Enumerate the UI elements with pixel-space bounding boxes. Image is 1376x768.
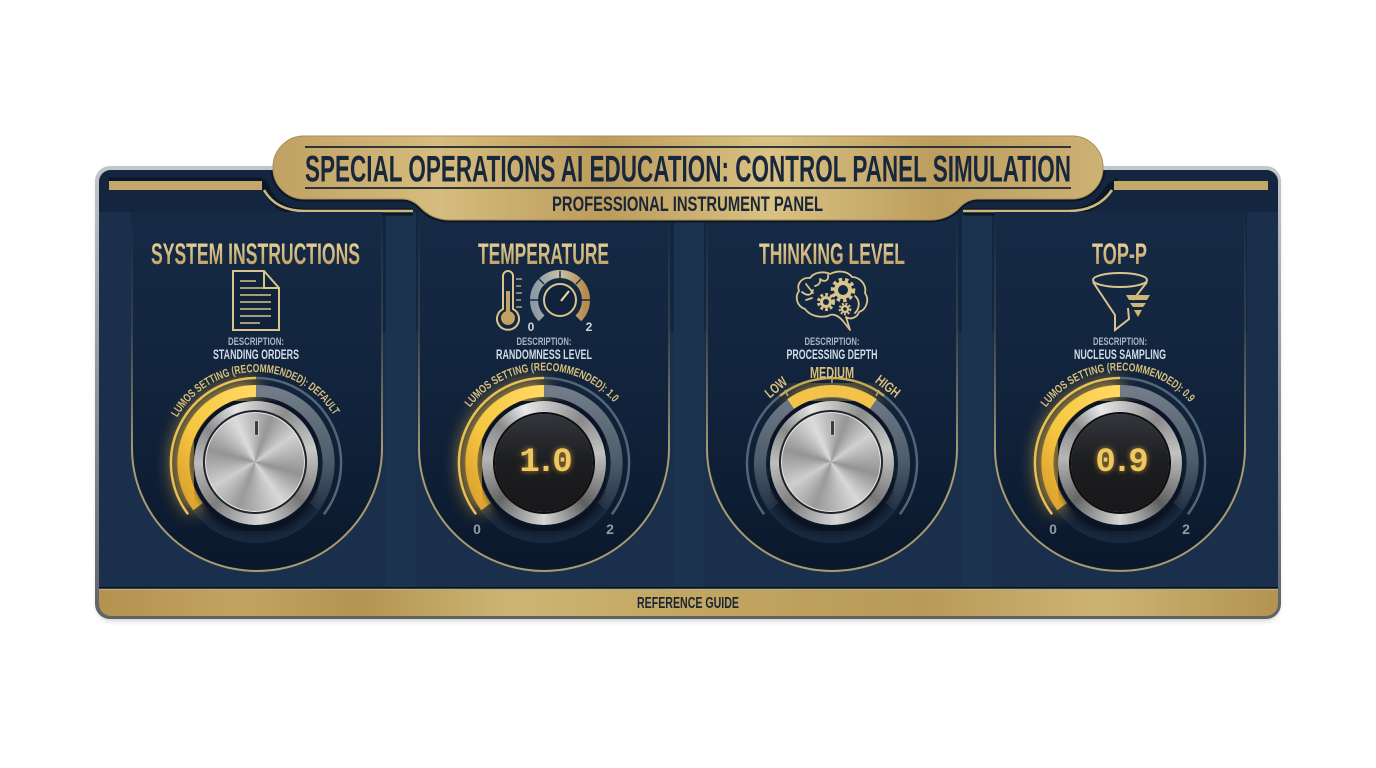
knob: [194, 401, 318, 531]
upper gold trim left: [109, 181, 413, 212]
knob with readout: 1.0: [519, 444, 569, 482]
description: [786, 336, 878, 362]
setting label: LUMOS SETTING (RECOMMENDED): 1.0: [464, 362, 619, 407]
subtitle: PROFESSIONAL INSTRUMENT PANEL: [552, 193, 823, 216]
panel: temperature: [418, 227, 670, 572]
panel outline: [419, 212, 669, 571]
icon: funnel: [1093, 273, 1150, 330]
description: RANDOMNESS LEVEL: [496, 347, 592, 362]
description: PROCESSING DEPTH: [786, 347, 878, 362]
panel outline: [132, 212, 382, 571]
icon: gauge: [528, 271, 593, 334]
dial gauge: [1024, 362, 1206, 543]
icon: document: [233, 271, 279, 330]
dial gauge: [160, 364, 342, 543]
description: [496, 336, 592, 362]
panel: thinking level: [707, 212, 957, 571]
description: [1074, 336, 1166, 362]
icon: gauge: 0: [528, 320, 535, 334]
heading: SYSTEM INSTRUCTIONS: [151, 238, 360, 271]
panel: system instructions: [131, 212, 383, 572]
description: [213, 336, 299, 362]
upper gold trim right: [963, 181, 1268, 212]
description: DESCRIPTION:: [228, 336, 284, 348]
scale labels: [1049, 521, 1190, 537]
knob: [770, 401, 894, 531]
scale labels: 2: [1182, 521, 1190, 537]
control panel illustration: [94, 136, 1282, 624]
dial gauge: [747, 365, 917, 543]
scale labels: [473, 521, 614, 537]
level labels: HIGH: [873, 371, 904, 401]
level labels: MEDIUM: [810, 365, 854, 382]
level labels: [761, 365, 904, 401]
heading: TEMPERATURE: [478, 238, 609, 271]
scale labels: 2: [606, 521, 614, 537]
icon: thermometer: [497, 271, 522, 330]
knob with readout: 0.9: [1095, 444, 1145, 482]
panel outline: [995, 212, 1245, 571]
panel outline: [707, 212, 957, 571]
heading: TOP-P: [1092, 238, 1147, 271]
setting label: LUMOS SETTING (RECOMMENDED): DEFAULT: [170, 364, 340, 417]
description: DESCRIPTION:: [516, 336, 572, 348]
panel chassis: [95, 166, 1281, 621]
description: DESCRIPTION:: [804, 336, 860, 348]
setting label: LUMOS SETTING (RECOMMENDED): 0.9: [1040, 362, 1195, 407]
description: DESCRIPTION:: [1093, 336, 1147, 348]
description: STANDING ORDERS: [213, 347, 299, 362]
title plate: [273, 136, 1103, 220]
level labels: LOW: [761, 373, 791, 401]
icon: brain with gears: [797, 272, 867, 330]
panel: top-p: [994, 212, 1246, 572]
description: NUCLEUS SAMPLING: [1074, 347, 1166, 362]
scale labels: 0: [1049, 521, 1057, 537]
icon: gauge: 2: [586, 320, 593, 334]
scale labels: 0: [473, 521, 481, 537]
heading: THINKING LEVEL: [759, 238, 905, 271]
footer bar: [99, 588, 1278, 616]
dial gauge: [448, 362, 630, 543]
footer text: REFERENCE GUIDE: [637, 595, 739, 612]
